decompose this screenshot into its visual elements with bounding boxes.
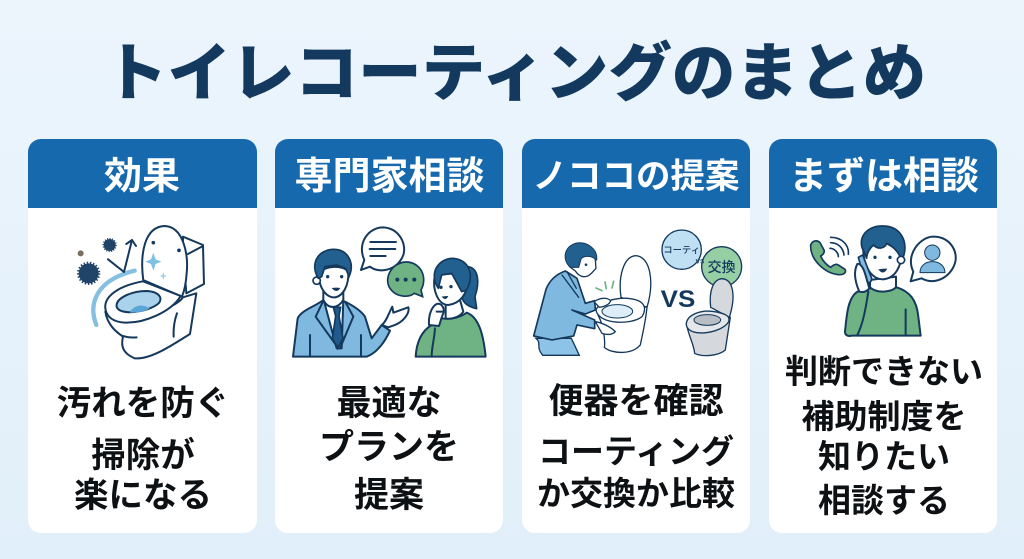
- label: small vs: vs: [696, 256, 705, 266]
- header: 効果: [28, 139, 257, 208]
- text: 便器を確認 コーティング か交換か比較: [537, 382, 735, 512]
- text: 便器を確認 コーティング か交換か比較: か交換か比較: [537, 475, 735, 512]
- icon: checking toilet, coating vs replacement: [534, 230, 742, 356]
- header: まずは相談: まずは相談: [789, 156, 979, 198]
- panel: 専門家相談: [275, 139, 503, 533]
- text: 便器を確認 コーティング か交換か比較: 便器を確認: [548, 382, 724, 421]
- bubble: 交換: [702, 247, 742, 287]
- text: 判断できない 補助制度を 知りたい 相談する: 補助制度を: [802, 398, 966, 435]
- panel: ノココの提案: [522, 139, 750, 533]
- header: 専門家相談: [275, 139, 503, 208]
- toilet: grey: [686, 279, 733, 356]
- phone receiver: [811, 237, 848, 275]
- panel: 効果: [28, 139, 257, 533]
- speech bubble: dots: [388, 262, 424, 297]
- text: 最適な プランを 提案: 最適な: [336, 384, 442, 423]
- panel: まずは相談: [769, 139, 997, 533]
- text: 最適な プランを 提案: 提案: [354, 476, 424, 515]
- text: 汚れを防ぐ 掃除が 楽になる: 掃除が: [91, 436, 195, 475]
- person: [845, 226, 921, 336]
- header: 専門家相談: 専門家相談: [294, 156, 485, 198]
- header: ノココの提案: [522, 139, 750, 208]
- man: [293, 249, 409, 357]
- header: 効果: 効果: [104, 156, 180, 198]
- text: 判断できない 補助制度を 知りたい 相談する: 相談する: [818, 482, 950, 519]
- text: 最適な プランを 提案: [319, 384, 459, 515]
- icon: toilet with germs: [78, 226, 204, 358]
- woman: [416, 258, 486, 357]
- text: 汚れを防ぐ 掃除が 楽になる: 楽になる: [74, 477, 212, 515]
- text: 判断できない 補助制度を 知りたい 相談する: 判断できない: [785, 353, 983, 390]
- icon: consultant and customer talking: [293, 227, 486, 357]
- bubble: コーティ: コーティ: [663, 245, 700, 255]
- bubble: コーティ: [662, 230, 701, 269]
- text: 汚れを防ぐ 掃除が 楽になる: [57, 385, 229, 515]
- text: 最適な プランを 提案: プランを: [319, 428, 459, 467]
- bubble: 交換: 交換: [708, 259, 736, 275]
- text: 判断できない 補助制度を 知りたい 相談する: 知りたい: [818, 438, 950, 475]
- header: まずは相談: [769, 139, 997, 208]
- text: 汚れを防ぐ 掃除が 楽になる: 汚れを防ぐ: [57, 385, 229, 423]
- toilet: white: [594, 256, 651, 352]
- header: ノココの提案: ノココの提案: [532, 158, 740, 196]
- label: VS: VS: [661, 286, 695, 313]
- person inspecting toilet: [534, 243, 614, 355]
- text: 便器を確認 コーティング か交換か比較: コーティング: [538, 433, 734, 470]
- speech bubble: user: [911, 237, 956, 281]
- icon: person on the phone: [811, 226, 956, 336]
- title: トイレコーティングのまとめ: [104, 39, 926, 109]
- text: 判断できない 補助制度を 知りたい 相談する: [785, 353, 983, 519]
- speech bubble: lines: [361, 227, 404, 270]
